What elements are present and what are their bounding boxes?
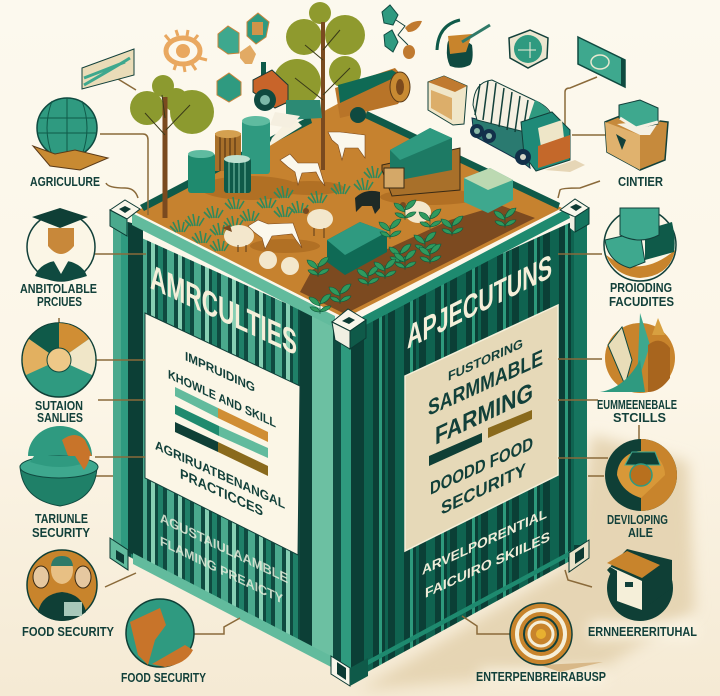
container — [110, 101, 589, 686]
grass tufts — [170, 166, 383, 251]
icon: people portrait — [27, 550, 97, 621]
icon: world map globe — [126, 599, 194, 667]
left wall caption: AGUSTAIULAAMBLE — [160, 511, 288, 587]
panel text: security: SECURITY — [441, 460, 526, 520]
animal: sheep right — [303, 208, 333, 238]
right wall — [345, 215, 587, 676]
label: tangible security: SECURITY — [32, 526, 91, 540]
corner block bottom front — [331, 656, 368, 686]
icon: crate — [428, 76, 467, 125]
label: developing: DEVILOPING — [607, 513, 668, 527]
truck shadow — [545, 160, 585, 172]
label: developing — [607, 513, 668, 540]
label: ambitolable: PRCIUES — [37, 295, 82, 309]
label: sustain: SANLIES — [37, 411, 83, 425]
top left rail — [132, 213, 335, 328]
label: providing facilities — [609, 281, 674, 309]
tractor — [253, 62, 322, 128]
left bottom rail — [133, 553, 333, 668]
animal: cow — [248, 220, 302, 249]
tree left — [130, 75, 214, 218]
left wall title: AMRCULTIES — [150, 257, 297, 363]
storage cylinders — [188, 116, 270, 193]
label: tangible security — [32, 512, 91, 540]
panel text: food: DOODD FOOD — [430, 433, 533, 500]
label: agriculture: AGRICULURE — [30, 175, 100, 189]
label halos — [480, 622, 695, 682]
right panel — [405, 305, 558, 551]
icon: map card — [82, 49, 134, 89]
label: providing facilities: PROIODING — [610, 281, 672, 295]
panel text: improving: IMPRUIDING — [185, 349, 255, 395]
right wall caption: FAICUIRO SKIILES — [425, 529, 550, 602]
label: developing: AILE — [628, 526, 653, 540]
left wall caption: FLAMING PREAICTY — [160, 534, 283, 607]
panel text: knowledge: KHOWLE AND SKILL — [168, 367, 276, 431]
panel bars — [429, 410, 532, 466]
left corner post — [113, 222, 143, 560]
front corner post — [300, 225, 587, 670]
icon: corn leaves — [600, 313, 675, 393]
top soil face — [135, 101, 562, 318]
connectors — [59, 77, 639, 634]
label: food security bottom: FOOD SECURITY — [121, 671, 207, 685]
dark tilled soil — [300, 205, 535, 314]
label: entrepreneurship: ENTERPENBREIRABUSP — [476, 670, 606, 684]
panel text: farming: FARMING — [435, 376, 533, 451]
log stack and wagon — [335, 68, 410, 123]
icon: box in circle — [607, 549, 673, 621]
label: sustain: SUTAION — [35, 399, 83, 413]
icon: farmer — [437, 20, 490, 68]
right wall caption: ARVELPORENTIAL — [422, 506, 547, 579]
green tarp box — [327, 222, 387, 275]
right bottom rail — [368, 551, 570, 665]
animal: sheep in field — [400, 201, 431, 223]
corner block top left — [110, 200, 140, 236]
label: enumerable skills — [597, 398, 677, 425]
label: center: CINTIER — [618, 175, 663, 189]
icon: storage drums circle — [604, 208, 676, 281]
ground shadow — [360, 435, 695, 690]
icon: hexagon leaf — [509, 30, 548, 68]
label: entrepreneurial: ERNNEERERITUHAL — [588, 625, 697, 639]
label: providing facilities: FACUDITES — [609, 295, 674, 309]
panel text: practices: PRACTICCES — [180, 467, 263, 520]
icon: leaf network — [382, 5, 422, 59]
animal: goat middle — [280, 154, 325, 186]
shaded soil patches — [200, 176, 480, 253]
icon: donut chart — [605, 439, 677, 511]
top right rail — [360, 208, 570, 328]
animal: dark sheep — [355, 191, 380, 214]
green crate — [464, 168, 513, 213]
corner block bottom left — [110, 538, 128, 570]
back edges of top — [140, 111, 560, 211]
panel text: sustainable: SARMMABLE — [428, 344, 543, 421]
animal: sheep left — [222, 225, 254, 252]
label: sustain — [35, 399, 83, 425]
icon: sign board — [578, 37, 625, 87]
tree right — [273, 2, 365, 170]
icon: globe in hand — [33, 98, 108, 170]
panel text: agricultural: AGRIRUATBENANGAL — [155, 438, 285, 512]
icon: truck — [470, 80, 570, 171]
animal: lambs — [259, 251, 299, 275]
label: enumerable skills: EUMMEENEBALE — [597, 398, 677, 412]
left panel — [145, 313, 300, 555]
icon: box with books — [605, 100, 668, 170]
container on trailer — [382, 128, 460, 196]
panel bars — [175, 387, 268, 476]
label: enumerable skills: STCILLS — [613, 411, 666, 425]
right wall title: APJECUTUNS — [407, 247, 552, 357]
label: ambitolable: ANBITOLABLE — [20, 282, 97, 296]
icons: floating cubes — [217, 13, 269, 102]
label: food security left: FOOD SECURITY — [22, 625, 115, 639]
left wall — [113, 225, 345, 672]
icon: concentric target — [510, 603, 603, 672]
label: tangible security: TARIUNLE — [35, 512, 88, 526]
animal: goat upper right — [328, 132, 365, 160]
icon: graduate — [27, 208, 95, 281]
icon: sun eye — [165, 30, 207, 72]
label: ambitolable — [20, 282, 97, 309]
icon: globe bowl — [20, 426, 98, 506]
corner block top right — [560, 199, 589, 232]
corner block bottom right — [569, 540, 589, 572]
corner block front — [332, 309, 366, 349]
icon: segmented wheel — [22, 323, 96, 397]
crop plants — [307, 200, 516, 314]
panel text: fostering: FUSTORING — [448, 336, 523, 384]
